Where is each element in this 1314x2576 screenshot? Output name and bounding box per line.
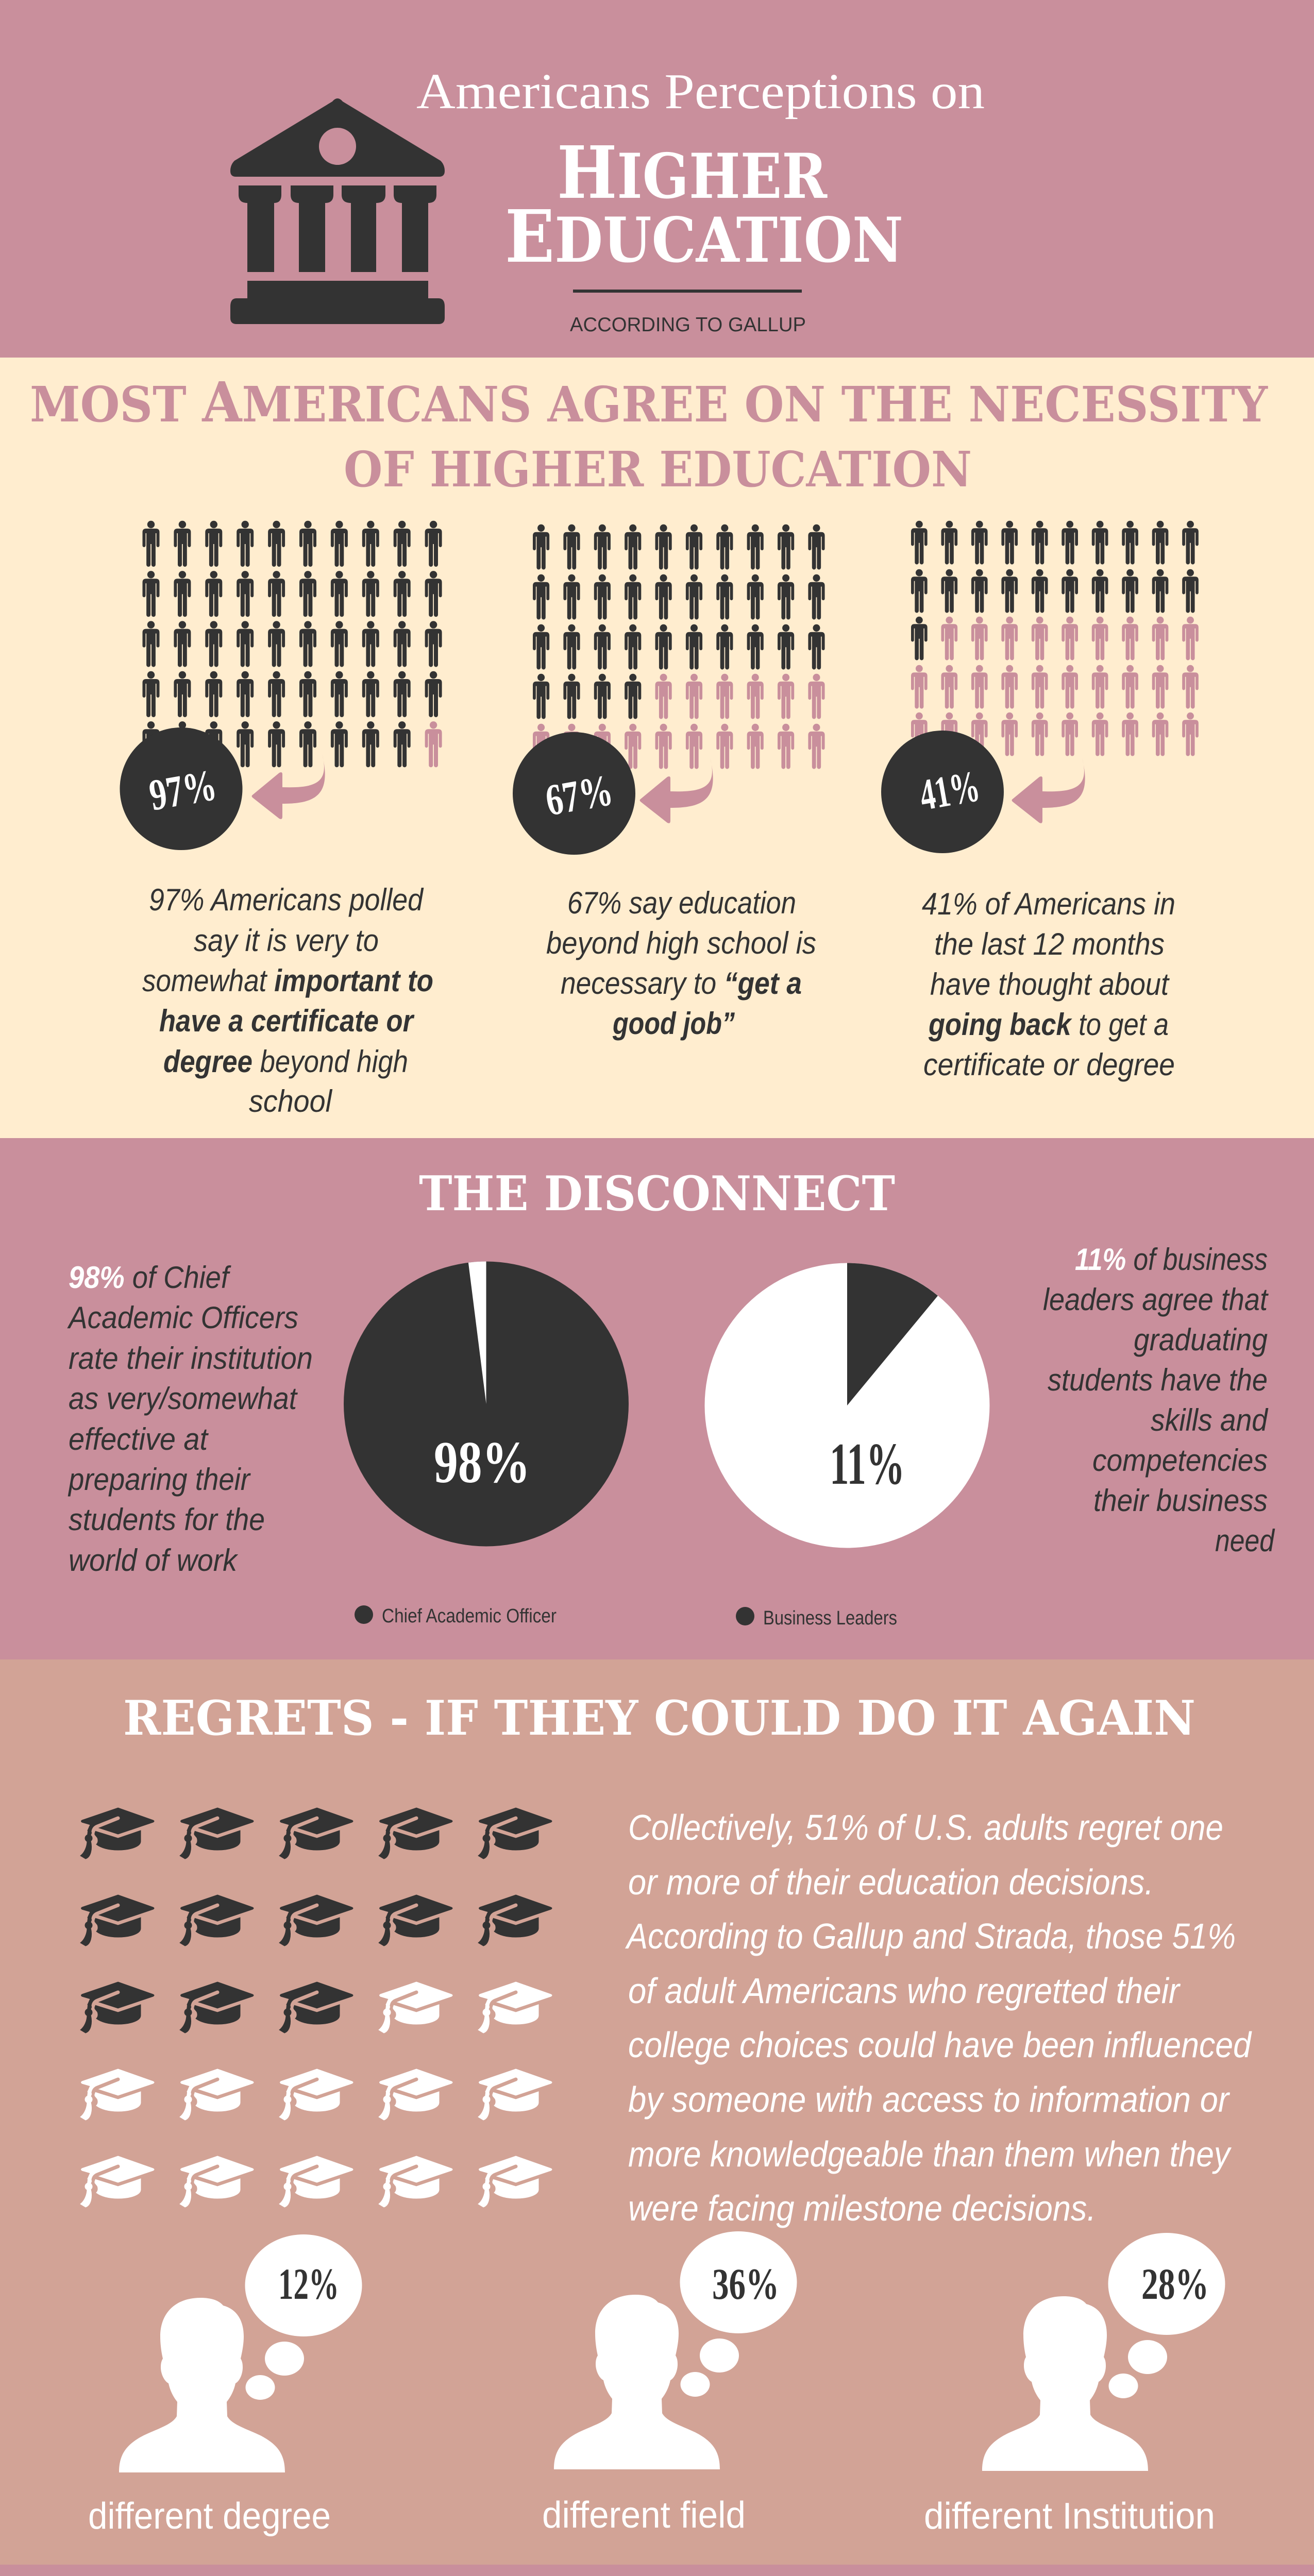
- text: 41 percent description: 41% of Americans in: [922, 887, 1175, 921]
- text: business leaders: leaders agree that: [1043, 1282, 1269, 1317]
- text: 67 percent description: [546, 886, 816, 1041]
- text: regrets description: Collectively, 51% of U.S. adults regret one: [628, 1807, 1223, 1848]
- heading: most Americans agree: MOST AMERICANS AGREE ON THE NECESSITY: [30, 370, 1268, 435]
- callout: 67 percent: [513, 732, 635, 855]
- text: 97 percent description: degree beyond high: [163, 1044, 408, 1079]
- chart: 11 percent pie: 11%: [830, 1431, 905, 1497]
- panel: header: [0, 0, 1314, 358]
- text: chief academic officers: students for the: [69, 1502, 265, 1537]
- arrow: to 97 percent: [251, 754, 325, 819]
- text: 97 percent description: 97% Americans polled: [149, 883, 424, 917]
- callout: 41 percent: 41%: [916, 761, 983, 820]
- label: different institution: different Institution: [924, 2496, 1215, 2537]
- arrow: to 41 percent: [1012, 758, 1085, 823]
- title: Americans Perceptions on: Americans Perceptions on: [416, 64, 985, 120]
- chart: 41 percent pictogram: [911, 521, 1199, 756]
- text: regrets description: [625, 1807, 1252, 2228]
- heading: most Americans agree: [30, 370, 1268, 498]
- title: Education: EDUCATION: [505, 195, 903, 279]
- callout: 97 percent: 97%: [145, 759, 220, 820]
- callout: 67 percent: 67%: [542, 765, 616, 825]
- text: chief academic officers: [67, 1260, 313, 1578]
- panel: necessity of higher education: [0, 358, 1314, 1138]
- text: 67 percent description: beyond high school is: [546, 926, 816, 960]
- arrow: to 67 percent: [640, 758, 713, 823]
- icon: thinking person 12 percent: [119, 2234, 362, 2472]
- panel: regrets: [0, 1659, 1314, 2565]
- text: 41 percent description: have thought about: [930, 967, 1170, 1002]
- text: regrets description: or more of their education decisions.: [628, 1862, 1154, 1902]
- chart: 97 percent pictogram: [142, 521, 442, 767]
- text: chief academic officers: Academic Officers: [67, 1300, 298, 1335]
- text: 67 percent description: good job”: [612, 1006, 735, 1041]
- label: different degree: different degree: [88, 2496, 331, 2537]
- heading: the disconnect: THE DISCONNECT: [419, 1165, 895, 1222]
- text: 97 percent description: [142, 883, 433, 1118]
- chart: 67 percent pictogram: [533, 524, 825, 769]
- text: chief academic officers: world of work: [69, 1543, 239, 1578]
- panel: the takeaway: [0, 2565, 1314, 2576]
- text: business leaders: need: [1215, 1523, 1275, 1558]
- text: business leaders: competencies: [1092, 1443, 1268, 1478]
- subtitle: according to Gallup: ACCORDING TO GALLUP: [570, 314, 806, 336]
- text: 97 percent description: somewhat important to: [142, 963, 433, 998]
- text: business leaders: 11% of business: [1075, 1242, 1268, 1277]
- chart: 98 percent pie: [344, 1261, 629, 1547]
- text: regrets description: by someone with access to information or: [628, 2079, 1230, 2120]
- panel: the disconnect: [0, 1138, 1314, 1659]
- chart: graduation cap pictogram: [80, 1808, 552, 2207]
- callout: 41 percent: [881, 731, 1004, 853]
- icon: thinking person 28 percent: [982, 2233, 1225, 2471]
- text: regrets description: were facing milestone decisions.: [628, 2188, 1096, 2228]
- chart: 11 percent pie: [705, 1263, 989, 1548]
- legend: chief academic officer: Chief Academic Officer: [382, 1605, 557, 1627]
- text: business leaders: students have the: [1048, 1363, 1268, 1397]
- text: business leaders: [1043, 1242, 1275, 1558]
- text: 67 percent description: necessary to “get a: [561, 966, 802, 1001]
- icon: university building: [230, 98, 445, 324]
- text: business leaders: graduating: [1134, 1323, 1268, 1357]
- text: business leaders: skills and: [1151, 1403, 1268, 1437]
- text: 67 percent description: 67% say education: [567, 886, 796, 920]
- text: regrets description: According to Gallup and Strada, those 51%: [625, 1916, 1236, 1956]
- text: 97 percent description: school: [249, 1084, 333, 1118]
- icon: thinking person 36 percent: 36%: [712, 2259, 779, 2309]
- text: regrets description: of adult Americans who regretted their: [628, 1971, 1181, 2011]
- text: chief academic officers: rate their institution: [69, 1341, 313, 1376]
- chart: 98 percent pie: 98%: [434, 1430, 530, 1496]
- text: chief academic officers: 98% of Chief: [69, 1260, 231, 1295]
- icon: thinking person 36 percent: [554, 2231, 797, 2469]
- label: different field: different field: [542, 2495, 746, 2536]
- heading: regrets: REGRETS - IF THEY COULD DO IT AGAIN: [123, 1690, 1195, 1746]
- text: business leaders: their business: [1093, 1483, 1268, 1518]
- text: chief academic officers: preparing their: [68, 1462, 251, 1497]
- text: 41 percent description: the last 12 months: [934, 927, 1165, 961]
- icon: thinking person 28 percent: 28%: [1141, 2259, 1209, 2309]
- text: chief academic officers: effective at: [69, 1422, 209, 1456]
- text: 97 percent description: say it is very to: [194, 923, 379, 958]
- legend: business leaders: Business Leaders: [763, 1607, 897, 1629]
- text: regrets description: college choices could have been influenced: [628, 2025, 1252, 2065]
- text: chief academic officers: as very/somewhat: [69, 1381, 298, 1416]
- title: Higher: HIGHER: [557, 131, 828, 215]
- heading: most Americans agree: OF HIGHER EDUCATION: [344, 441, 972, 498]
- text: 97 percent description: have a certificate or: [159, 1004, 415, 1038]
- text: 41 percent description: certificate or degree: [923, 1047, 1175, 1082]
- icon: thinking person 12 percent: 12%: [278, 2259, 339, 2309]
- text: 41 percent description: going back to get a: [928, 1007, 1169, 1042]
- text: 41 percent description: [922, 887, 1175, 1082]
- callout: 97 percent: [120, 727, 242, 850]
- text: regrets description: more knowledgeable than them when they: [628, 2134, 1232, 2174]
